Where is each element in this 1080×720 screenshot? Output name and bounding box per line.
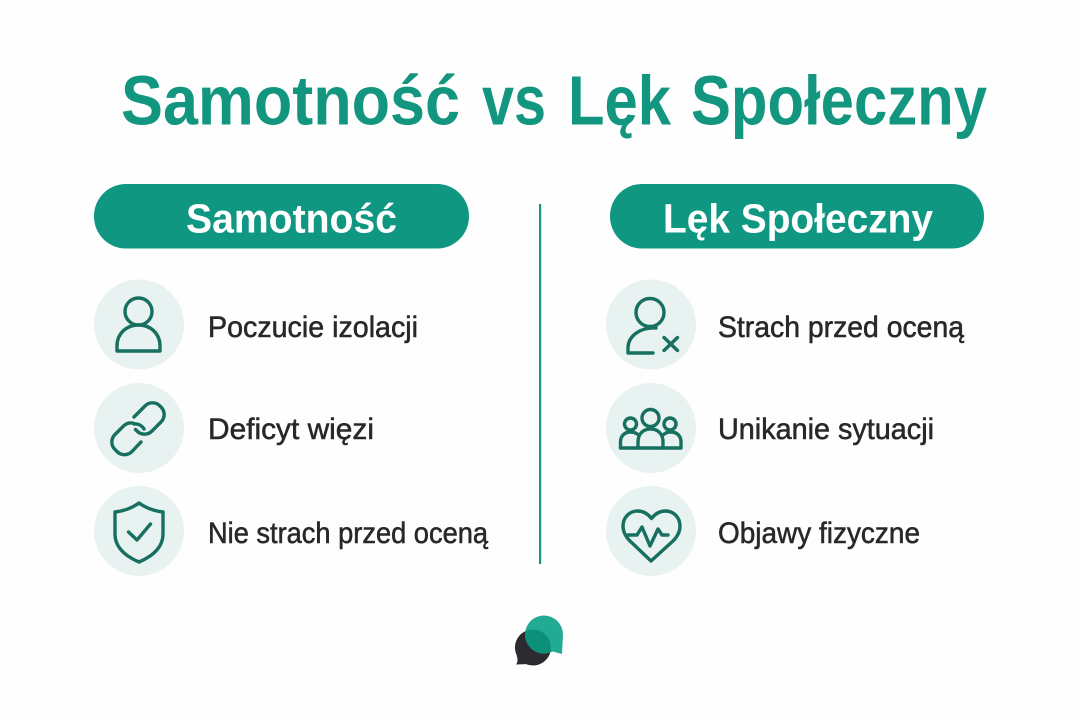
item: Unikanie sytuacji — [606, 383, 934, 473]
icon: person with x — [606, 280, 696, 370]
title: Lęk — [568, 62, 671, 140]
item: Nie strach przed oceną: Nie strach przed oceną — [208, 517, 488, 550]
heading pill: Lęk Społeczny: Lęk Społeczny — [663, 196, 933, 242]
panel: Lęk Społeczny — [606, 184, 984, 576]
panel: Samotność — [94, 184, 488, 576]
item: Strach przed oceną — [606, 280, 964, 370]
icon: chain link — [94, 383, 184, 473]
icon: group of people — [606, 383, 696, 473]
item: Nie strach przed oceną — [94, 486, 488, 576]
item: Deficyt więzi — [94, 383, 374, 473]
item: Deficyt więzi: Deficyt więzi — [208, 413, 374, 446]
item: Poczucie izolacji — [94, 280, 418, 370]
item: Unikanie sytuacji: Unikanie sytuacji — [718, 413, 934, 446]
icon: shield with check — [94, 486, 184, 576]
icon: heart with pulse — [606, 486, 696, 576]
title: vs — [482, 62, 546, 140]
heading pill: Lęk Społeczny — [610, 184, 984, 248]
logo: chat bubbles — [515, 616, 563, 665]
divider — [539, 204, 541, 564]
heading pill: Samotność: Samotność — [186, 196, 397, 242]
item: Objawy fizyczne: Objawy fizyczne — [718, 517, 920, 550]
title: Samotność — [121, 62, 460, 140]
item: Poczucie izolacji: Poczucie izolacji — [208, 311, 418, 344]
item: Strach przed oceną: Strach przed oceną — [718, 311, 964, 344]
item: Objawy fizyczne — [606, 486, 920, 576]
icon: person — [94, 280, 184, 370]
title: Społeczny — [691, 62, 987, 140]
heading pill: Samotność — [94, 184, 469, 248]
title — [121, 62, 987, 140]
